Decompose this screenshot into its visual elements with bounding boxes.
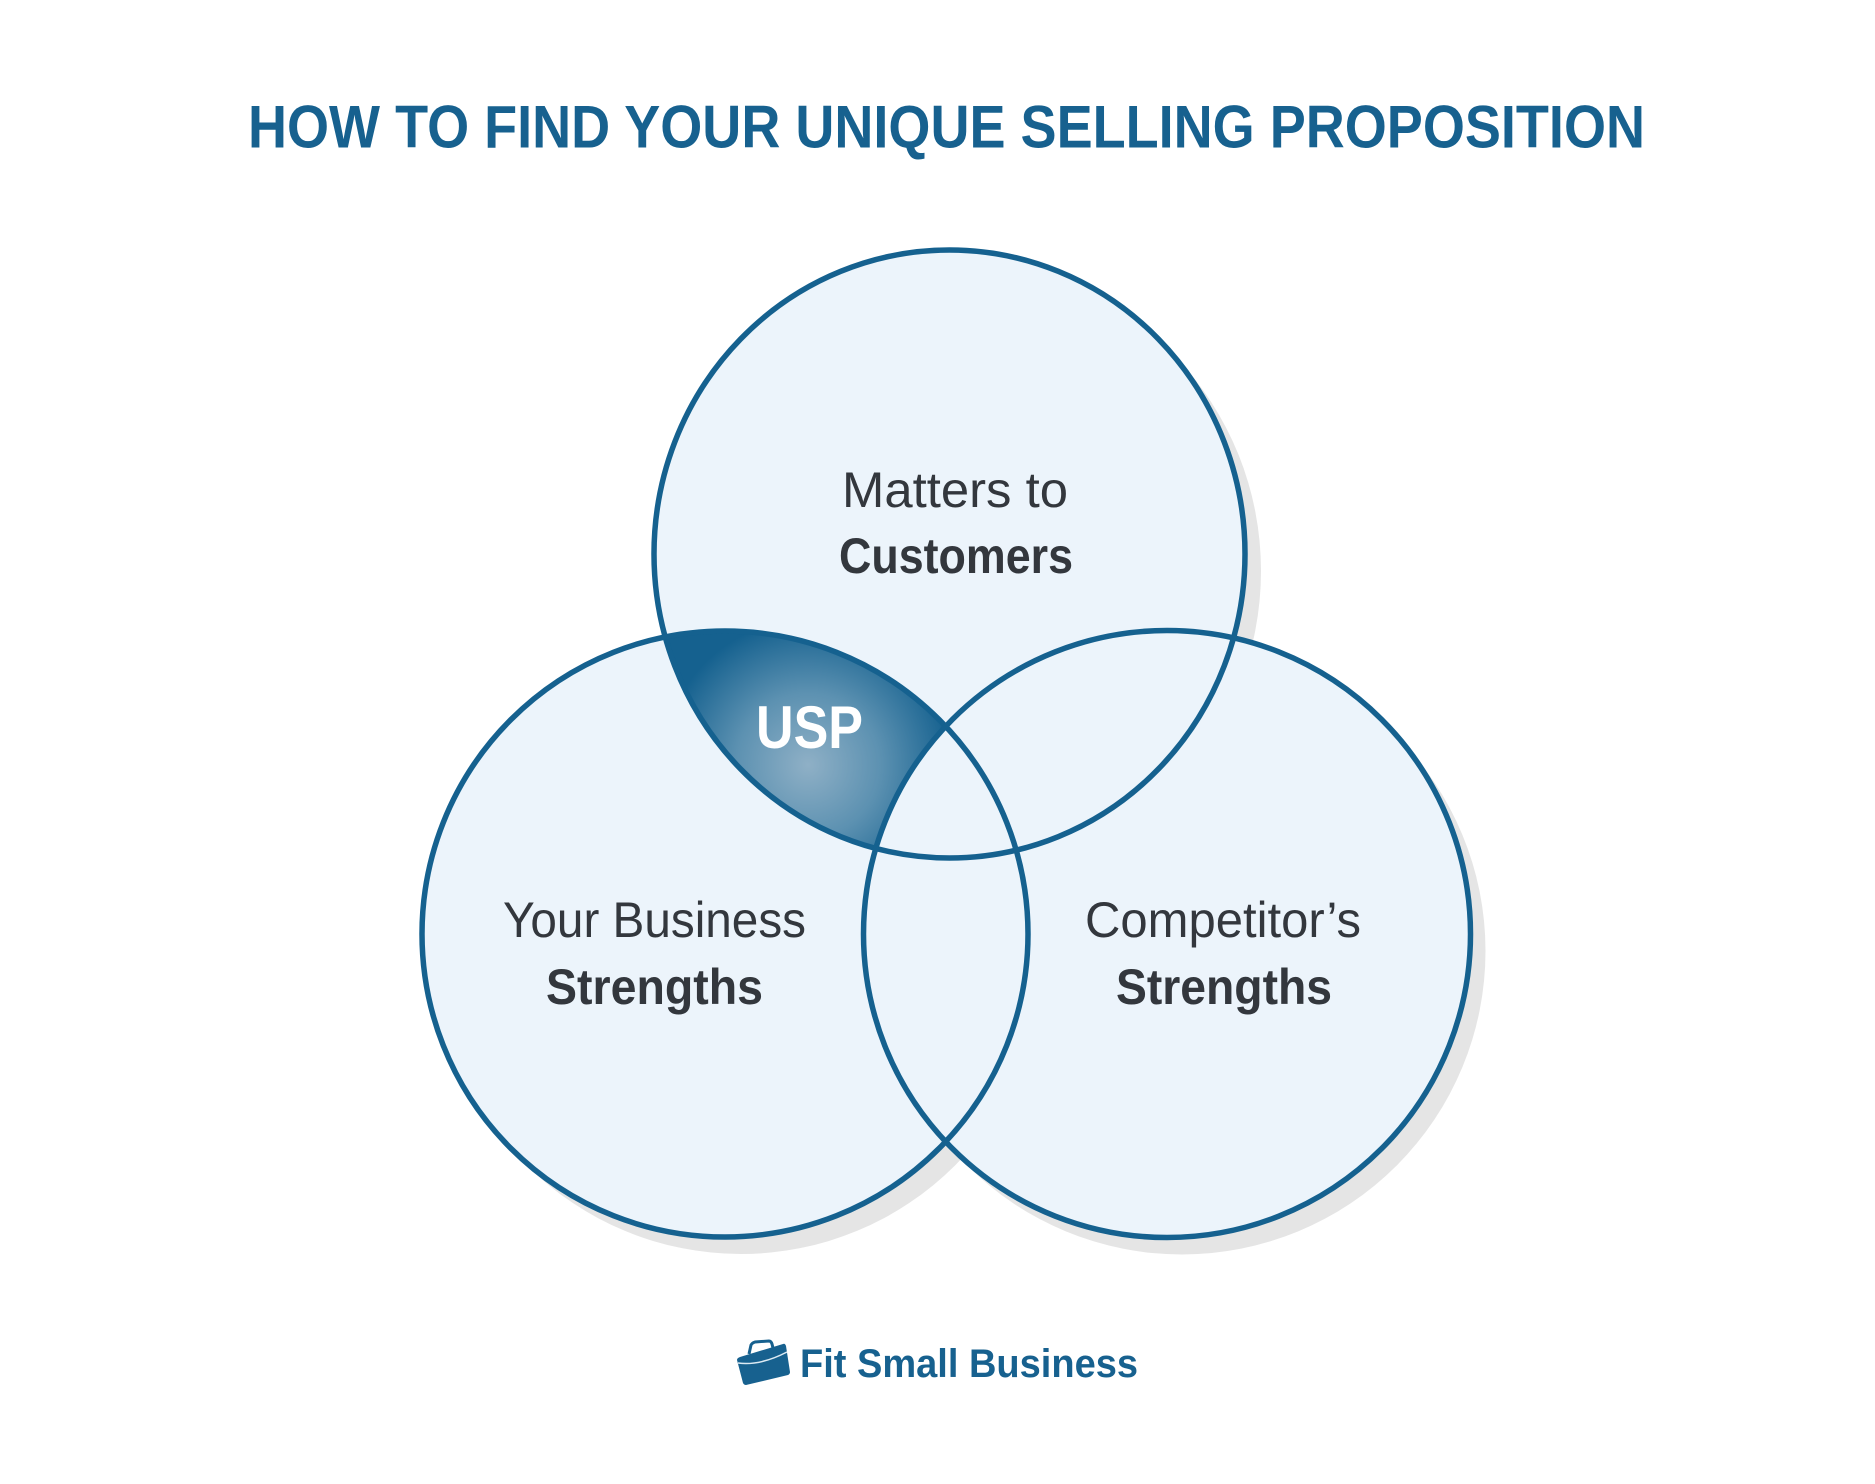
label: your business strengths: Your Business [503,892,806,948]
label: competitor's strengths: Strengths [1116,959,1332,1015]
venn diagram [422,250,1486,1254]
circle fills [422,250,1470,1238]
title: HOW TO FIND YOUR UNIQUE SELLING PROPOSITION [248,94,1645,160]
label: competitor's strengths [1085,892,1361,1015]
label: matters to customers: Matters to [842,462,1068,518]
circle shadows [438,267,1486,1254]
USP overlap region [665,631,947,848]
label: your business strengths [503,892,806,1015]
circle outlines [422,250,1470,1238]
logo wordmark: Fit Small Business [800,1342,1138,1386]
label: competitor's strengths: Competitor’s [1085,892,1361,948]
label: USP: USP [756,694,863,761]
logo: Fit Small Business [737,1341,1138,1386]
icon: briefcase [737,1341,790,1385]
label: your business strengths: Strengths [546,959,763,1015]
label: matters to customers [839,462,1073,584]
label: matters to customers: Customers [839,528,1073,584]
